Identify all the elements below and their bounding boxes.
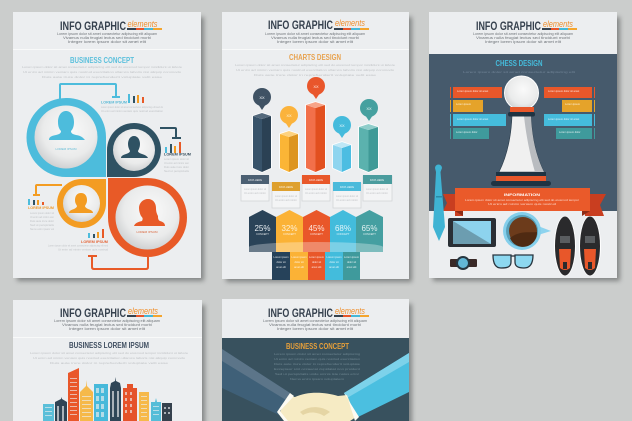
left sleeve xyxy=(222,349,290,415)
mini chart and text: left: Nemo enim ipsam vol xyxy=(30,227,54,231)
header: elements xyxy=(335,306,365,316)
mini chart and text: bottom xyxy=(48,229,108,252)
intro text: Lorem ipsum dolor sit amet consectetur adipiscing elit sed do eiusmod tempor incididunt ut labore xyxy=(235,63,395,67)
body text: Nemo enim ipsam voluptatem xyxy=(290,377,345,381)
percentage arrows: CONCEPT xyxy=(283,232,296,236)
lower columns xyxy=(272,252,360,280)
intro text xyxy=(30,351,188,365)
bar 3 xyxy=(306,77,325,172)
label cards: Lorem ipsum dolor sit xyxy=(366,187,388,191)
percentage arrows xyxy=(249,210,383,252)
label cards: DATA HERE xyxy=(279,185,293,189)
intro text xyxy=(235,63,395,77)
label cards: Ut enim ad minim xyxy=(275,198,297,202)
icon: left shoe xyxy=(554,216,576,276)
right text boxes: Lorem ipsum dolor xyxy=(559,130,581,134)
header: INFO GRAPHIC xyxy=(268,308,333,320)
label cards xyxy=(241,175,392,208)
heading: business concept: BUSINESS CONCEPT xyxy=(70,56,134,65)
left text boxes xyxy=(450,87,506,139)
label cards: Ut enim ad minim xyxy=(366,191,388,195)
blue node: LOREM IPSUM xyxy=(55,147,77,151)
icon: watch xyxy=(450,256,477,270)
mini chart and text: top right xyxy=(101,94,163,113)
header: Vivamus nulla feugiat lectus sed tincidunt morbi xyxy=(269,323,361,327)
body text: Duis aute irure dolor in reprehenderit voluptate xyxy=(274,362,360,366)
header xyxy=(265,18,369,44)
mini chart and text: left xyxy=(28,199,54,231)
lower columns: Lorem ipsum xyxy=(292,255,306,259)
panel: charts design xyxy=(222,12,409,280)
lower columns: dolor sit xyxy=(329,260,339,264)
header: Integer lorem ipsum dolor sit amet elit xyxy=(69,327,145,331)
icon: glasses xyxy=(493,255,533,268)
label cards: DATA HERE xyxy=(340,185,354,189)
header: Vivamus nulla feugiat lectus sed tincidunt morbi xyxy=(62,323,152,327)
mini chart and text: top right: Ut enim ad minim veniam quis nostrud exercitation xyxy=(101,109,163,113)
header: INFO GRAPHIC xyxy=(476,21,541,33)
lower columns: dolor sit xyxy=(312,260,321,264)
panel: business concept xyxy=(13,12,201,278)
lower columns: amet elit xyxy=(294,265,304,269)
mini chart and text: right xyxy=(164,142,191,173)
percentage arrows: CONCEPT xyxy=(256,232,269,236)
panel: business lorem ipsum xyxy=(13,300,202,421)
percentage arrows: CONCEPT xyxy=(310,232,323,236)
bar 3: XX xyxy=(313,84,319,89)
mini chart and text: right: Sed ut perspiciatis xyxy=(164,169,190,173)
header xyxy=(57,19,162,44)
percentage arrows: 45% xyxy=(308,224,325,233)
information ribbon: Ut enim ad minim veniam quis nostrud xyxy=(488,202,557,206)
header: elements xyxy=(543,19,573,29)
percentage arrows: 65% xyxy=(361,224,378,233)
mini chart and text: left: Duis aute irure dolor xyxy=(30,219,54,223)
lower columns: dolor sit xyxy=(276,260,286,264)
label cards: DATA HERE xyxy=(309,178,323,182)
city skyline xyxy=(43,368,172,421)
label cards: Lorem ipsum dolor sit xyxy=(244,187,266,191)
header: elements xyxy=(128,19,158,29)
header: Lorem ipsum dolor sit amet consectetur adipiscing elit aliquam xyxy=(265,32,365,36)
mini chart and text: left: Sed ut perspiciatis xyxy=(30,223,54,227)
percentage arrows: CONCEPT xyxy=(363,232,376,236)
intro text: Duis aute irure dolor in reprehenderit voluptate velit esse xyxy=(50,361,169,365)
body text: Sed ut perspiciatis unde omnis iste natus error xyxy=(275,372,359,376)
lower columns: Lorem ipsum xyxy=(326,255,342,259)
intro text: Ut enim ad minim veniam quis nostrud exercitation ullamco laboris nisi aliquip commodo xyxy=(23,70,181,74)
icon: tie xyxy=(433,165,445,241)
mini chart and text: top right: LOREM IPSUM xyxy=(101,100,127,104)
left text boxes: Lorem ipsum dolor sit amet xyxy=(457,89,489,93)
mini chart and text: left: LOREM IPSUM xyxy=(28,206,54,210)
heading: business lorem ipsum: BUSINESS LOREM IPSUM xyxy=(69,341,149,350)
bar 2: XX xyxy=(286,113,292,118)
connectors xyxy=(33,84,181,269)
intro text: Lorem ipsum dolor sit amet consectetur adipiscing elit sed do eiusmod tempor incididunt ut labore xyxy=(22,65,182,69)
dark node xyxy=(107,123,161,177)
header: Lorem ipsum dolor sit amet consectetur adipiscing elit aliquam xyxy=(473,32,573,36)
header xyxy=(263,306,369,331)
lower columns: dolor sit xyxy=(294,260,304,264)
lower columns: amet elit xyxy=(329,265,339,269)
body text: Excepteur sint occaecat cupidatat non proident xyxy=(274,367,360,371)
blue node xyxy=(27,98,106,177)
mini chart and text: top right: Lorem ipsum dolor sit amet consectetur adipiscing elit sed do xyxy=(101,105,163,109)
lower columns: Lorem ipsum xyxy=(344,255,359,259)
intro text: Lorem ipsum dolor sit amet consectetur adipiscing elit xyxy=(463,70,575,74)
header xyxy=(473,19,577,44)
percentage arrows: 25% xyxy=(254,224,271,233)
bar 1 xyxy=(253,88,271,172)
bar 4: XX xyxy=(339,123,345,128)
lower columns: Lorem ipsum xyxy=(309,255,324,259)
header: INFO GRAPHIC xyxy=(60,21,126,33)
label cards: DATA HERE xyxy=(248,178,262,182)
lower columns: amet elit xyxy=(347,265,357,269)
lower columns: amet elit xyxy=(276,265,286,269)
bar 2 xyxy=(280,106,298,172)
information ribbon: Lorem ipsum dolor sit amet consectetur adipiscing elit sed do eiusmod tempor xyxy=(465,198,579,202)
mini chart and text: right: Lorem ipsum dolor sit xyxy=(164,157,189,161)
bar 4 xyxy=(333,116,351,172)
handshake xyxy=(277,393,359,421)
header: Integer lorem ipsum dolor sit amet elit xyxy=(68,40,146,44)
mini chart and text: left: Lorem ipsum dolor sit xyxy=(30,211,54,215)
mini chart and text: right: Ut enim ad minim ven xyxy=(164,161,189,165)
mini chart and text: bottom: Ut enim ad minim veniam quis nostrud xyxy=(58,248,108,252)
right sleeve xyxy=(344,353,409,417)
intro text: Ut enim ad minim veniam quis nostrud exercitation ullamco laboris nisi aliquip commodo xyxy=(236,68,394,72)
lower columns: Lorem ipsum xyxy=(274,255,288,259)
intro text: Duis aute irure dolor in reprehenderit voluptate velit esse xyxy=(254,73,377,77)
lower columns: amet elit xyxy=(312,265,322,269)
panel: business concept handshake xyxy=(222,299,409,421)
right text boxes: Lorem ipsum xyxy=(565,102,580,106)
orange node xyxy=(57,179,106,228)
building windows xyxy=(45,378,170,421)
heading: chess design: CHESS DESIGN xyxy=(496,59,543,68)
icon: tablet xyxy=(448,218,496,247)
label cards: DATA HERE xyxy=(370,178,384,182)
left text boxes: Lorem ipsum dolor xyxy=(456,130,478,134)
pawn xyxy=(491,76,551,186)
percentage arrows: CONCEPT xyxy=(337,232,350,236)
panel: chess design xyxy=(429,12,617,278)
right text boxes: Lorem ipsum dolor sit amet xyxy=(548,89,580,93)
header: INFO GRAPHIC xyxy=(268,20,333,32)
lower columns: dolor sit xyxy=(347,260,356,264)
header: Integer lorem ipsum dolor sit amet elit xyxy=(485,40,561,44)
body text: Ut enim ad minim veniam quis nostrud exercitation xyxy=(274,357,360,361)
information ribbon: INFORMATION xyxy=(504,192,540,197)
mini chart and text: bottom: LOREM IPSUM xyxy=(81,240,108,244)
body text: Lorem ipsum dolor sit amet consectetur adipiscing xyxy=(274,352,360,356)
header xyxy=(54,306,162,331)
intro text: Duis aute irure dolor in reprehenderit voluptate velit esse xyxy=(42,75,163,79)
icon: right shoe xyxy=(579,216,601,276)
heading: business concept: BUSINESS CONCEPT xyxy=(286,342,349,351)
mini chart and text: bottom: Lorem ipsum dolor sit amet consectetur adipiscing elit sed xyxy=(48,244,108,248)
label cards: Lorem ipsum dolor sit xyxy=(336,194,358,198)
bar 1: XX xyxy=(259,95,265,100)
mini chart and text: right: Duis aute irure dolor xyxy=(164,165,189,169)
right text boxes: Lorem ipsum dolor sit amet xyxy=(548,117,580,121)
header: Lorem ipsum dolor sit amet consectetur adipiscing elit aliquam xyxy=(57,32,157,36)
header: Integer lorem ipsum dolor sit amet elit xyxy=(277,40,353,44)
header: INFO GRAPHIC xyxy=(60,308,126,320)
label cards: Ut enim ad minim xyxy=(244,191,266,195)
red node xyxy=(108,178,187,257)
label cards: Ut enim ad minim xyxy=(305,191,327,195)
red node: LOREM IPSUM xyxy=(136,230,158,234)
information ribbon xyxy=(443,188,606,216)
label cards: Lorem ipsum dolor sit xyxy=(275,194,297,198)
label cards: Ut enim ad minim xyxy=(336,198,358,202)
percentage arrows: 68% xyxy=(335,224,351,233)
bar 5 xyxy=(359,99,378,172)
intro text: Ut enim ad minim veniam quis nostrud exercitation ullamco laboris nisi aliquip commodo xyxy=(33,356,185,360)
header: Vivamus nulla feugiat lectus sed tincidunt morbi xyxy=(271,36,359,40)
left text boxes: Lorem ipsum dolor sit amet xyxy=(457,117,489,121)
header: elements xyxy=(335,18,365,28)
header: Vivamus nulla feugiat lectus sed tincidunt morbi xyxy=(476,36,570,40)
heading: charts design: CHARTS DESIGN xyxy=(289,53,341,62)
left text boxes: Lorem ipsum xyxy=(456,102,471,106)
percentage arrows: 32% xyxy=(281,224,298,233)
label cards: Lorem ipsum dolor sit xyxy=(305,187,327,191)
body text xyxy=(274,352,360,381)
intro text xyxy=(22,65,182,79)
mini chart and text: left: Ut enim ad minim ven xyxy=(30,215,54,219)
header: Lorem ipsum dolor sit amet consectetur adipiscing elit aliquam xyxy=(263,319,367,323)
right text boxes xyxy=(544,87,595,139)
icon: coffee cup xyxy=(503,212,551,250)
header: Lorem ipsum dolor sit amet consectetur adipiscing elit aliquam xyxy=(54,319,160,323)
bar 5: XX xyxy=(366,106,372,111)
header: Vivamus nulla feugiat lectus sed tincidunt morbi xyxy=(63,36,151,40)
header: Integer lorem ipsum dolor sit amet elit xyxy=(277,327,353,331)
intro text: Lorem ipsum dolor sit amet consectetur adipiscing elit sed do eiusmod tempor incididunt ut labore xyxy=(30,351,188,355)
header: elements xyxy=(128,306,158,316)
mini chart and text: right: LOREM IPSUM xyxy=(164,152,191,156)
